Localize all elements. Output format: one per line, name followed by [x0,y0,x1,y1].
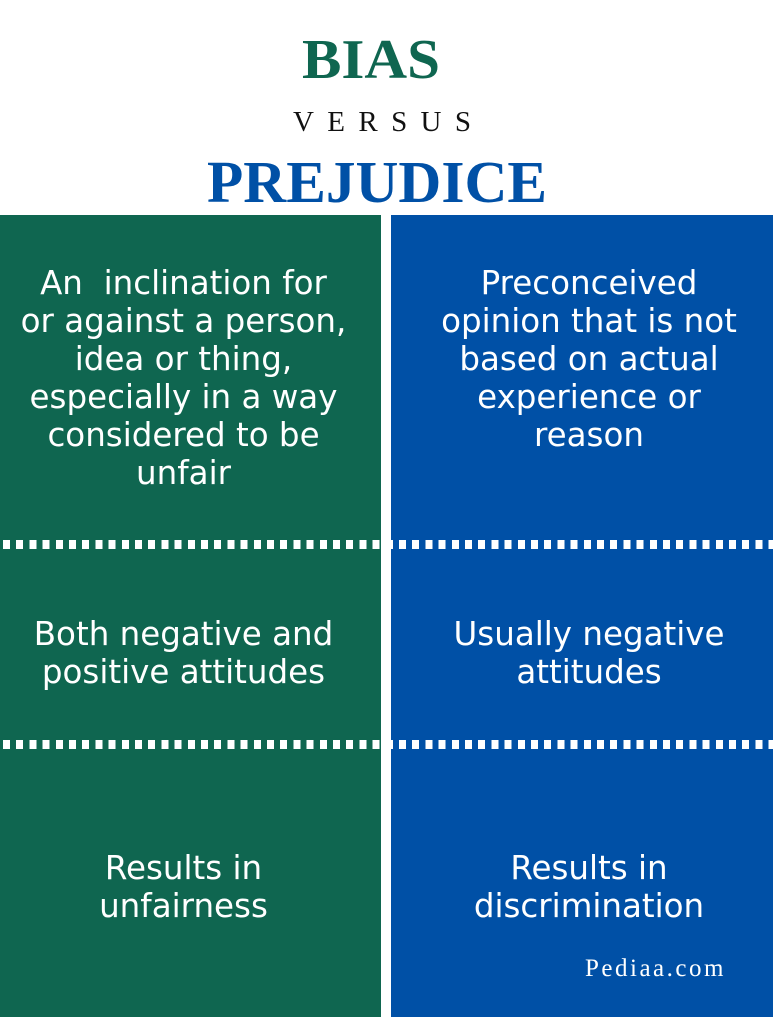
prejudice result [474,849,704,925]
bias result [99,849,268,925]
title [207,29,547,215]
prejudice definition: Preconceived [481,264,697,302]
bias definition [21,264,346,492]
bias result: unfairness [99,887,268,925]
title: prejudice: PREJUDICE [207,149,547,215]
prejudice definition: experience or [477,378,701,416]
bias result: Results in [105,849,262,887]
prejudice definition [441,264,737,454]
prejudice definition: opinion that is not [441,302,737,340]
title: bias: BIAS [302,29,440,91]
bias attitudes: positive attitudes [42,653,325,691]
panel: prejudice [391,215,773,1017]
title: versus: VERSUS [293,106,471,138]
prejudice attitudes: Usually negative [454,615,724,653]
prejudice attitudes: attitudes [516,653,662,691]
bias attitudes [34,615,333,691]
prejudice result: Results in [510,849,668,887]
prejudice result: discrimination [474,887,704,925]
prejudice definition: reason [534,416,644,454]
panel: bias [0,215,381,1017]
bias definition: especially in a way [30,378,337,416]
logo: Pediaa.com [585,955,726,982]
bias definition: idea or thing, [75,340,292,378]
bias definition: An inclination for [40,264,327,302]
bias definition: considered to be [47,416,320,454]
bias definition: unfair [136,454,231,492]
bias attitudes: Both negative and [34,615,333,653]
bias definition: or against a person, [21,302,346,340]
prejudice definition: based on actual [459,340,719,378]
prejudice attitudes [454,615,724,691]
